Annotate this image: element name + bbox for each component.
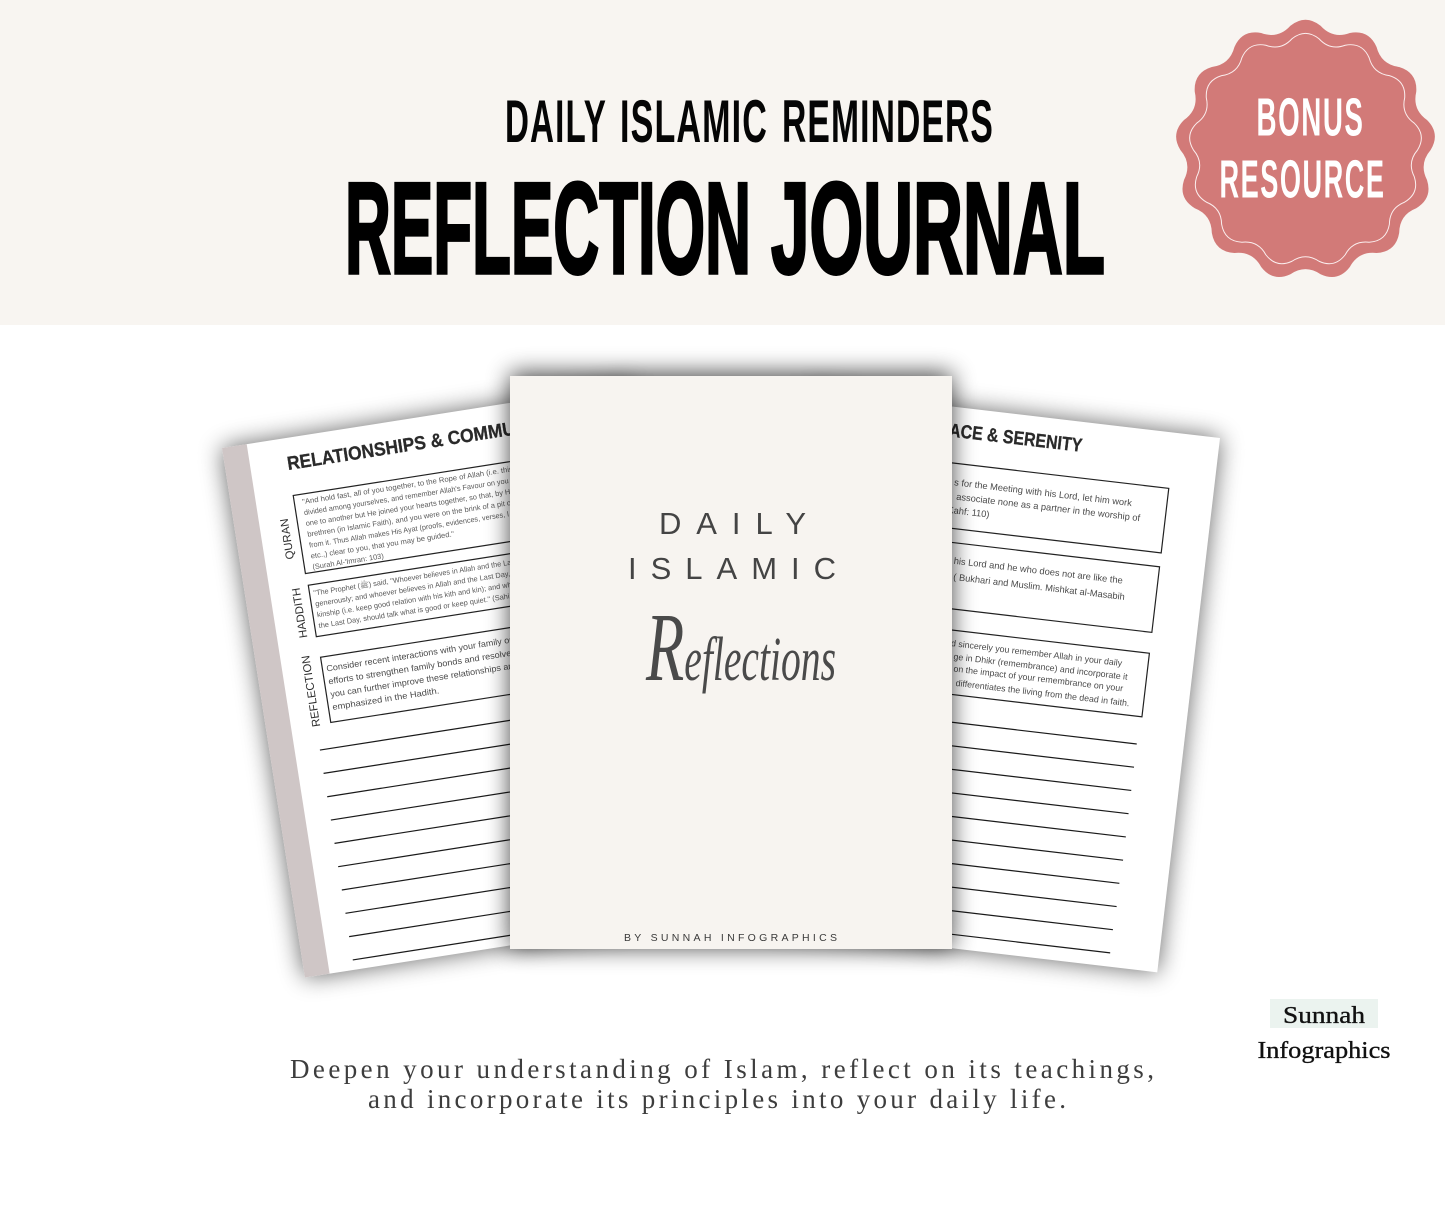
panel: right journal page xyxy=(745,390,1220,972)
heading: daily islamic reminders xyxy=(505,88,994,155)
quran box: s for the Meeting with his Lord, let him work xyxy=(954,477,1133,508)
hadith box: ( Bukhari and Muslim. Mishkat al-Masabih xyxy=(953,572,1125,602)
reflection section: emphasized in the Hadith. xyxy=(332,685,440,712)
page heading: RELATIONSHIPS & COMMUNITY xyxy=(286,412,556,475)
badge: bonus resource xyxy=(1176,20,1435,277)
reflection section xyxy=(300,601,665,728)
quran box xyxy=(824,449,1169,553)
haddith section: "The Prophet (ﷺ) said, "Whoever believes in Allah and the La xyxy=(313,557,513,598)
logo: sunnah infographics xyxy=(1258,999,1390,1064)
quran section xyxy=(275,443,641,576)
tagline: and incorporate its principles into your daily life. xyxy=(368,1084,1066,1114)
writing lines xyxy=(320,695,702,960)
writing lines xyxy=(762,703,1137,953)
reflection section: REFLECTION xyxy=(300,654,323,728)
quran section: brethren (in Islamic Faith), and you were on the brink of a pit o xyxy=(307,498,512,539)
heading: daily islamic reminders: DAILY xyxy=(505,88,607,155)
reflection box: d sincerely you remember Allah in your daily xyxy=(951,638,1123,668)
reflection box: differentiates the living from the dead in faith. xyxy=(955,678,1130,708)
header band xyxy=(0,0,1445,325)
haddith section: the Last Day, should talk what is good or keep quiet." (Sahi xyxy=(318,591,510,630)
cover script: reflections: Reflections xyxy=(645,594,836,702)
reflection section: efforts to strengthen family bonds and resolve xyxy=(328,648,512,686)
hadith box xyxy=(814,527,1160,632)
heading: daily islamic reminders: REMINDERS xyxy=(782,88,994,155)
reflection box: on the impact of your remembrance on your xyxy=(953,664,1124,693)
quran section: (Surah Al-'Imran: 103) xyxy=(312,551,384,571)
heading: daily islamic reminders: ISLAMIC xyxy=(620,88,768,155)
haddith section: kinship (i.e. keep good relation with his kith and kin); and wh xyxy=(316,580,512,619)
quran section: divided among yourselves, and remember Allah's Favour on you xyxy=(303,476,509,517)
cover byline: BY SUNNAH INFOGRAPHICS xyxy=(624,932,837,944)
hadith box: his Lord and he who does not are like the xyxy=(953,556,1123,586)
cover title: islamic: ISLAMIC xyxy=(628,551,836,586)
reflection section: Consider recent interactions with your family or xyxy=(326,634,513,673)
reflection section: you can further improve these relationships an xyxy=(330,661,514,699)
cover title: daily: DAILY xyxy=(659,506,806,541)
reflection box: ge in Dhikr (remembrance) and incorporate it xyxy=(953,651,1129,682)
quran section: "And hold fast, all of you together, to the Rope of Allah (i.e. this xyxy=(302,464,514,506)
panel: journal cover xyxy=(510,373,952,949)
quran section: from it. Thus Allah makes His Ayat (proofs, evidences, verses, l xyxy=(308,509,510,550)
title: reflection journal: REFLECTION xyxy=(345,155,751,301)
haddith section: generously; and whoever believes in Allah and the Last Day, xyxy=(315,569,511,608)
page heading: PEACE & SERENITY xyxy=(927,418,1084,457)
logo: sunnah infographics: Sunnah xyxy=(1283,1003,1365,1029)
quran section: QURAN xyxy=(279,518,297,560)
reflection box xyxy=(804,614,1149,717)
panel: left journal page xyxy=(222,384,715,978)
tagline xyxy=(290,1054,1154,1114)
quran section: etc.,) clear to you, that you may be guided." xyxy=(310,529,455,561)
logo: sunnah infographics: Infographics xyxy=(1258,1038,1390,1064)
haddith section: HADDITH xyxy=(291,587,310,639)
quran box: associate none as a partner in the worship of xyxy=(956,492,1141,523)
haddith section xyxy=(290,533,651,639)
tagline: Deepen your understanding of Islam, reflect on its teachings, xyxy=(290,1054,1154,1084)
quran section: one to another but He joined your hearts together, so that, by H xyxy=(305,487,511,528)
title: reflection journal: JOURNAL xyxy=(771,155,1105,301)
quran box: Kahf: 110) xyxy=(947,505,990,520)
